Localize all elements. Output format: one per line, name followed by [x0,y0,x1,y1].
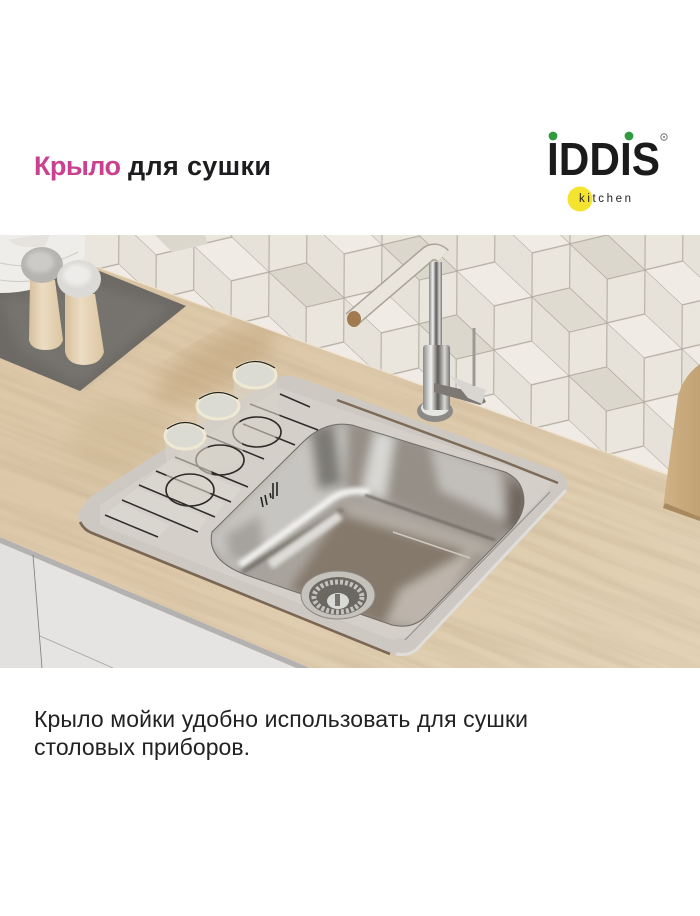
glass 2 [196,392,244,475]
faucet handle [434,383,486,405]
registered mark [661,134,667,140]
body text [34,706,528,760]
drain strainer [301,571,375,619]
faucet spout [351,252,443,320]
stacked white bowls [0,235,85,293]
title: для сушки [128,151,271,181]
title: Крыло [34,151,121,181]
cutting board [663,364,700,521]
drying wing ribs [105,394,318,537]
sink bowl [212,424,524,626]
glasses [165,362,281,506]
logo wordmark: IDDIS [547,133,660,185]
photo: kitchen sink with drying wing [0,235,700,668]
countertop [0,266,700,668]
left wall [205,425,345,572]
kitchen label: kitchen [579,193,631,205]
right shaker [57,260,104,365]
cabinets [0,537,310,668]
glass 1 [165,422,214,506]
title [34,151,271,181]
faucet column [429,262,442,347]
tile wall [0,235,700,495]
left shaker [21,247,63,350]
faucet [347,252,486,422]
body text: Крыло мойки удобно использовать для сушки [34,706,528,732]
rim chrome edge [396,490,566,654]
grey stone mat [0,268,186,391]
sink [78,362,568,655]
glass 3 [233,362,281,447]
counter back edge highlight [100,268,700,486]
logo dots [549,132,633,140]
back wall [345,426,519,544]
salt and pepper shakers [21,247,104,365]
body text: столовых приборов. [34,734,250,760]
floor [290,505,490,630]
yellow spot [568,186,592,212]
rim shadow line [80,522,390,654]
textured tile faces [269,235,645,411]
logo: IDDIS kitchen [547,132,668,212]
sink rim [78,376,568,655]
overflow slots [261,482,277,507]
bowl crease highlights [240,491,370,565]
